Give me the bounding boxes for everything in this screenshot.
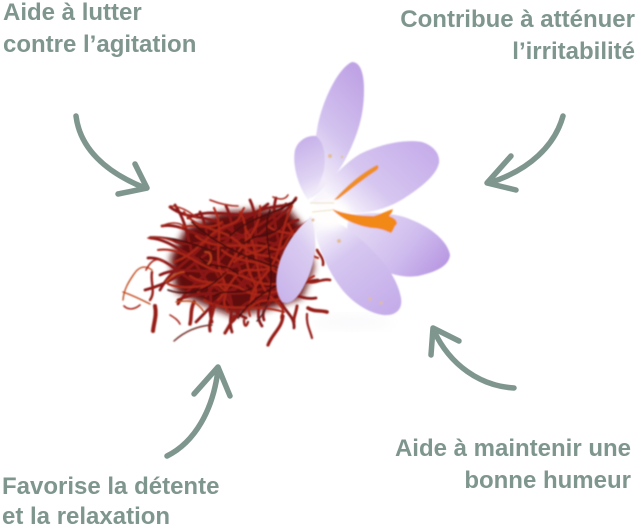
loose threads around the pile bbox=[150, 250, 330, 345]
label: détente: Favorise la détente bbox=[2, 473, 219, 500]
petal: lower left bbox=[276, 216, 315, 303]
soft shadow under flower bbox=[312, 316, 392, 328]
label: irritabilité bbox=[400, 6, 635, 65]
label: agitation: contre l’agitation bbox=[3, 31, 196, 58]
petal: top bbox=[311, 62, 364, 198]
petal: lower right bbox=[347, 213, 450, 277]
label: bonne humeur bbox=[395, 435, 631, 494]
illustration: saffron threads and crocus flower bbox=[123, 62, 450, 345]
flower centre bbox=[310, 199, 350, 229]
flower bbox=[276, 62, 450, 315]
saffron threads pile bbox=[123, 195, 330, 345]
stamen: upper bbox=[334, 165, 378, 200]
label: irritabilité: l’irritabilité bbox=[512, 38, 635, 65]
label: bonne humeur: bonne humeur bbox=[464, 467, 631, 494]
arrow: top left bbox=[76, 116, 147, 194]
label: agitation bbox=[3, 0, 196, 58]
label: détente bbox=[2, 473, 219, 530]
arrow: bottom centre bbox=[167, 367, 230, 456]
arrow: bottom right bbox=[431, 328, 514, 388]
pollen specks bbox=[312, 154, 382, 304]
arrow: top right bbox=[487, 116, 563, 190]
label: irritabilité: Contribue à atténuer bbox=[400, 6, 635, 33]
petal: bottom bbox=[312, 216, 401, 315]
petal: upper right bbox=[311, 141, 439, 213]
label: détente: et la relaxation bbox=[2, 503, 170, 530]
label: bonne humeur: Aide à maintenir une bbox=[395, 435, 631, 462]
stamen: lower bbox=[332, 209, 397, 233]
petal: small left bbox=[294, 136, 325, 200]
